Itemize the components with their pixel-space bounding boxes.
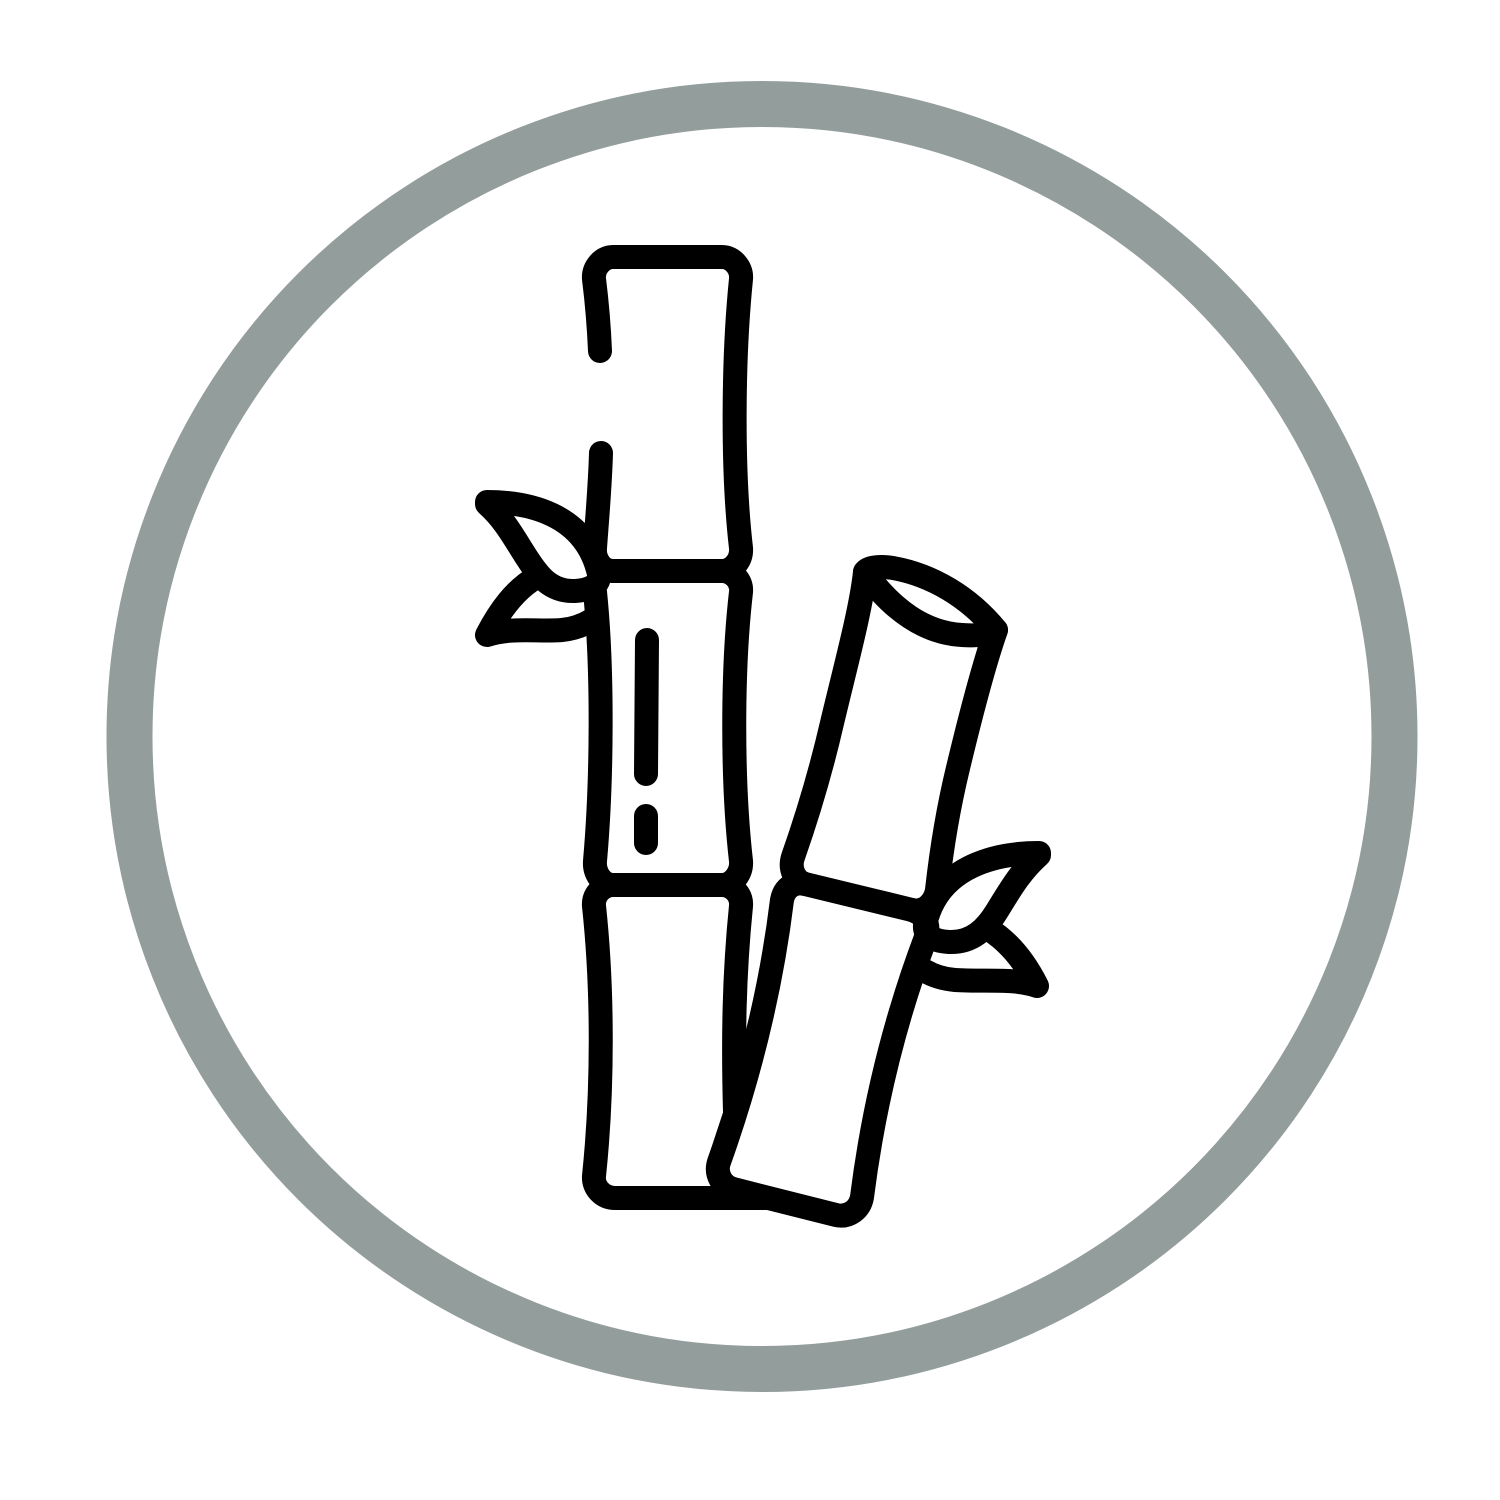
right stalk upper segment [792,572,996,910]
main stalk bottom segment [594,885,766,1198]
grey circle ring [130,104,1394,1369]
left leaf upper [487,502,599,591]
main stalk top segment [594,257,741,571]
right leaf lower [925,930,1037,986]
right stalk lower segment [718,883,927,1216]
icon: bamboo [487,257,1039,1216]
dash marks [646,640,647,843]
left leaf lower [487,578,592,635]
main stalk middle segment [595,571,741,885]
right leaf upper [925,853,1039,942]
right stalk top opening [865,567,996,635]
